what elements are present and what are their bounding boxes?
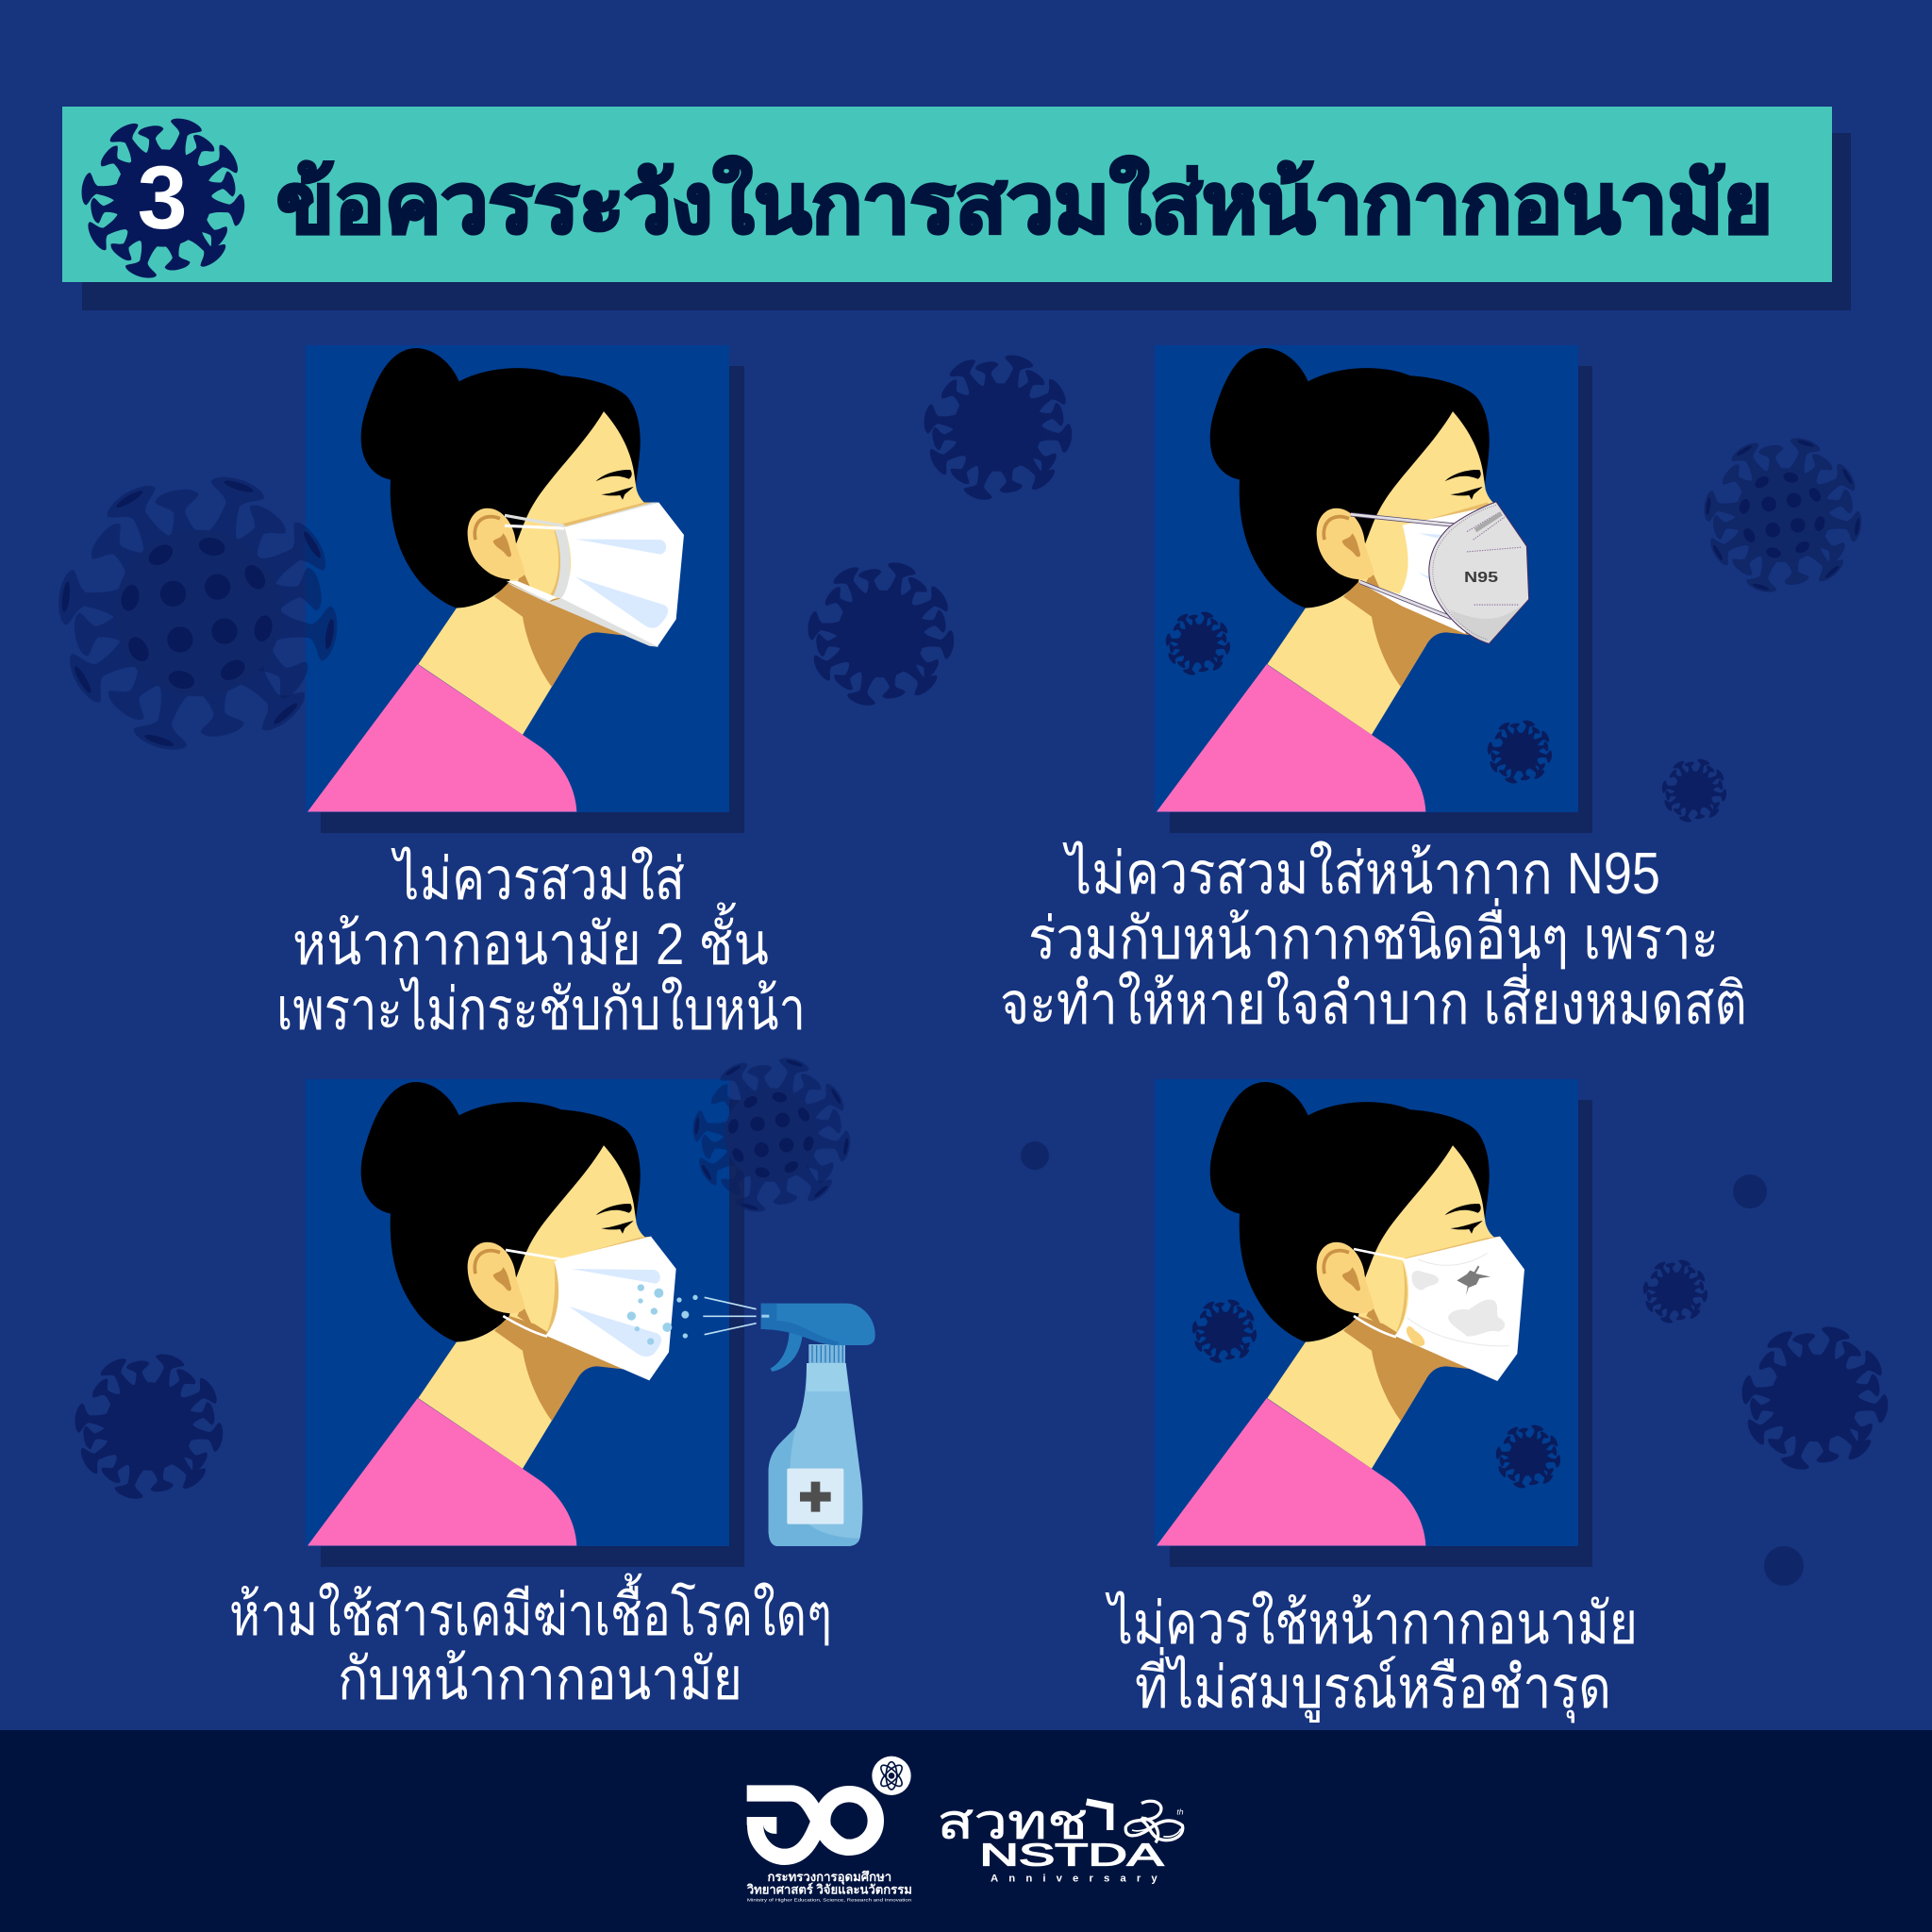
footer band — [0, 1730, 1932, 1932]
caption: panel 3 — [229, 1573, 832, 1712]
illustration: small viruses — [1191, 1298, 1561, 1490]
logo: ministry: วิทยาศาสตร์ วิจัยและนวัตกรรม — [746, 1883, 912, 1897]
panel: two masks — [306, 345, 744, 833]
illustration: mask with droplets — [503, 1237, 757, 1380]
icon: numbered virus badge — [80, 115, 246, 281]
caption: panel 1: เพราะไม่กระชับกับใบหน้า — [276, 976, 806, 1042]
virus overlapping panel 1 — [56, 472, 341, 756]
logo: NSTDA 30th anniversary: th — [1176, 1807, 1184, 1816]
logo: ministry: Ministry of Higher Education, Science, Research and Innovation — [747, 1898, 912, 1903]
icon: numbered virus badge: 3 — [138, 148, 187, 248]
background viruses — [74, 352, 1890, 1586]
caption: panel 1: ไม่ควรสวมใส่ — [391, 846, 685, 912]
panel: damaged mask — [1155, 1079, 1592, 1567]
caption: panel 1: หน้ากากอนามัย 2 ชั้น — [292, 902, 769, 977]
logo: NSTDA 30th anniversary — [937, 1795, 1184, 1884]
illustration: surgical mask — [505, 503, 684, 647]
logo: ministry — [746, 1757, 912, 1903]
logo: ministry: กระทรวงการอุดมศึกษา — [767, 1870, 891, 1885]
panel: spraying disinfectant — [306, 1079, 757, 1567]
illustration: stained mask — [1354, 1237, 1524, 1381]
header bar shadow — [82, 133, 1851, 310]
caption: panel 1 — [276, 846, 806, 1042]
header bar — [62, 107, 1832, 282]
caption: panel 3: ห้ามใช้สารเคมีฆ่าเชื้อโรคใดๆ — [229, 1573, 832, 1648]
caption: panel 2 — [1000, 841, 1747, 1037]
illustration: N95 respirator: N95 — [1464, 570, 1498, 586]
caption: panel 3: กับหน้ากากอนามัย — [338, 1647, 742, 1712]
panel: N95 mask — [1155, 345, 1592, 833]
caption: panel 4: ที่ไม่สมบูรณ์หรือชำรุด — [1135, 1647, 1611, 1723]
caption: panel 2: จะทำให้หายใจลำบาก เสี่ยงหมดสติ — [1000, 963, 1747, 1037]
logo: NSTDA 30th anniversary: NSTDA — [979, 1838, 1165, 1873]
logo: NSTDA 30th anniversary: Anniversary — [991, 1873, 1158, 1884]
illustration: small viruses — [1165, 610, 1553, 785]
logo: NSTDA 30th anniversary: สวทช — [937, 1795, 1088, 1848]
virus overlapping panel 3 — [691, 1055, 852, 1215]
illustration: N95 respirator — [1351, 502, 1529, 643]
icon: spray bottle — [761, 1304, 875, 1546]
caption: panel 2: ไม่ควรสวมใส่หน้ากาก N95 — [1062, 841, 1660, 907]
caption: panel 4: ไม่ควรใช้หน้ากากอนามัย — [1105, 1591, 1638, 1657]
caption: panel 2: ร่วมกับหน้ากากชนิดอื่นๆ เพราะ — [1028, 898, 1719, 972]
title: ข้อควรระวังในการสวมใส่หน้ากากอนามัย — [276, 156, 1773, 250]
caption: panel 4 — [1105, 1591, 1638, 1723]
